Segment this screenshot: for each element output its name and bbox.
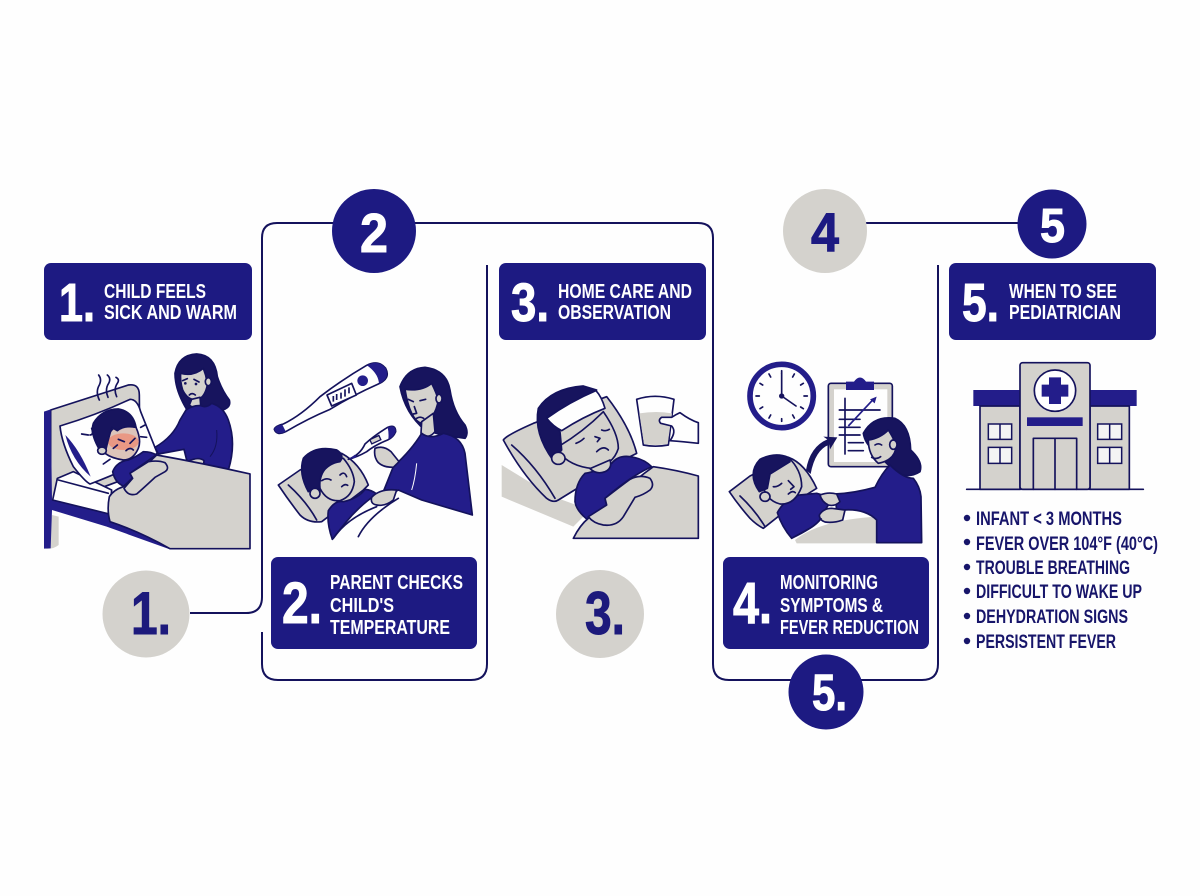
banner: step 4: MONITORING [780, 571, 878, 594]
banner: step 1 [44, 263, 252, 340]
icon: small thermometer [348, 426, 396, 459]
banner: step 3: HOME CARE AND [558, 280, 692, 303]
icon: wall clock [750, 364, 813, 428]
banner: step 4: SYMPTOMS & [780, 594, 883, 617]
list: warning signs: TROUBLE BREATHING [976, 557, 1130, 579]
panel: step 2 parent checks temperature [271, 189, 477, 649]
step marker: 4: 4 [811, 201, 839, 263]
illustration: monitoring child with clock and chart [729, 364, 922, 543]
banner: step 5: WHEN TO SEE [1009, 280, 1117, 303]
list: warning signs: INFANT < 3 MONTHS [976, 508, 1122, 530]
banner: step 1: SICK AND WARM [104, 301, 237, 324]
icon: hospital building [967, 363, 1143, 489]
step marker: 3: 3. [585, 580, 625, 647]
banner: step 2: CHILD'S [330, 594, 394, 617]
banner: step 5: PEDIATRICIAN [1009, 301, 1121, 324]
panel: step 4 monitoring symptoms [723, 189, 929, 730]
banner: step 1: 1. [59, 273, 95, 333]
banner: step 3: 3. [511, 273, 549, 333]
icon: large thermometer [274, 363, 387, 433]
panel: step 3 home care [499, 263, 706, 658]
illustration: parent taking child's temperature [274, 363, 472, 539]
banner: step 2: TEMPERATURE [330, 616, 450, 639]
banner: step 4 [723, 557, 929, 649]
banner: step 1: CHILD FEELS [104, 280, 206, 303]
banner: step 2: PARENT CHECKS [330, 571, 463, 594]
step marker: 4 [783, 189, 867, 273]
banner: step 5: 5. [962, 273, 999, 333]
icon: clipboard chart [828, 377, 892, 467]
banner: step 4: 4. [733, 571, 772, 636]
illustration: child resting with cold compress and water [502, 386, 698, 538]
step marker: 1 [102, 570, 190, 658]
step marker: 2 [332, 189, 416, 273]
list: warning signs [964, 508, 1158, 653]
banner: step 3 [499, 263, 706, 340]
step marker: 5 top: 5 [1040, 200, 1065, 253]
banner: step 2 [271, 557, 477, 649]
banner: step 4: FEVER REDUCTION [780, 616, 919, 639]
step marker: 5 bottom: 5. [812, 664, 847, 721]
panel: step 1 child feels sick [44, 263, 252, 658]
icon: glass of water [637, 396, 698, 446]
step marker: 3 [556, 570, 644, 658]
connector frame: steps 1 to 5 [190, 223, 1020, 680]
banner: step 2: 2. [282, 571, 322, 636]
illustration: sick child in bed with parent [44, 354, 250, 549]
banner: step 5 [949, 263, 1156, 340]
banner: step 3: OBSERVATION [558, 301, 671, 324]
list: warning signs: DEHYDRATION SIGNS [976, 606, 1128, 628]
step marker: 2: 2 [360, 202, 388, 264]
list: warning signs: DIFFICULT TO WAKE UP [976, 581, 1142, 603]
panel: step 5 when to see pediatrician [949, 190, 1158, 653]
step marker: 5 top [1018, 190, 1086, 258]
list: warning signs: PERSISTENT FEVER [976, 631, 1116, 653]
step marker: 1: 1. [131, 580, 171, 647]
arrow: child to chart [806, 437, 837, 474]
step marker: 5 bottom [788, 654, 864, 730]
